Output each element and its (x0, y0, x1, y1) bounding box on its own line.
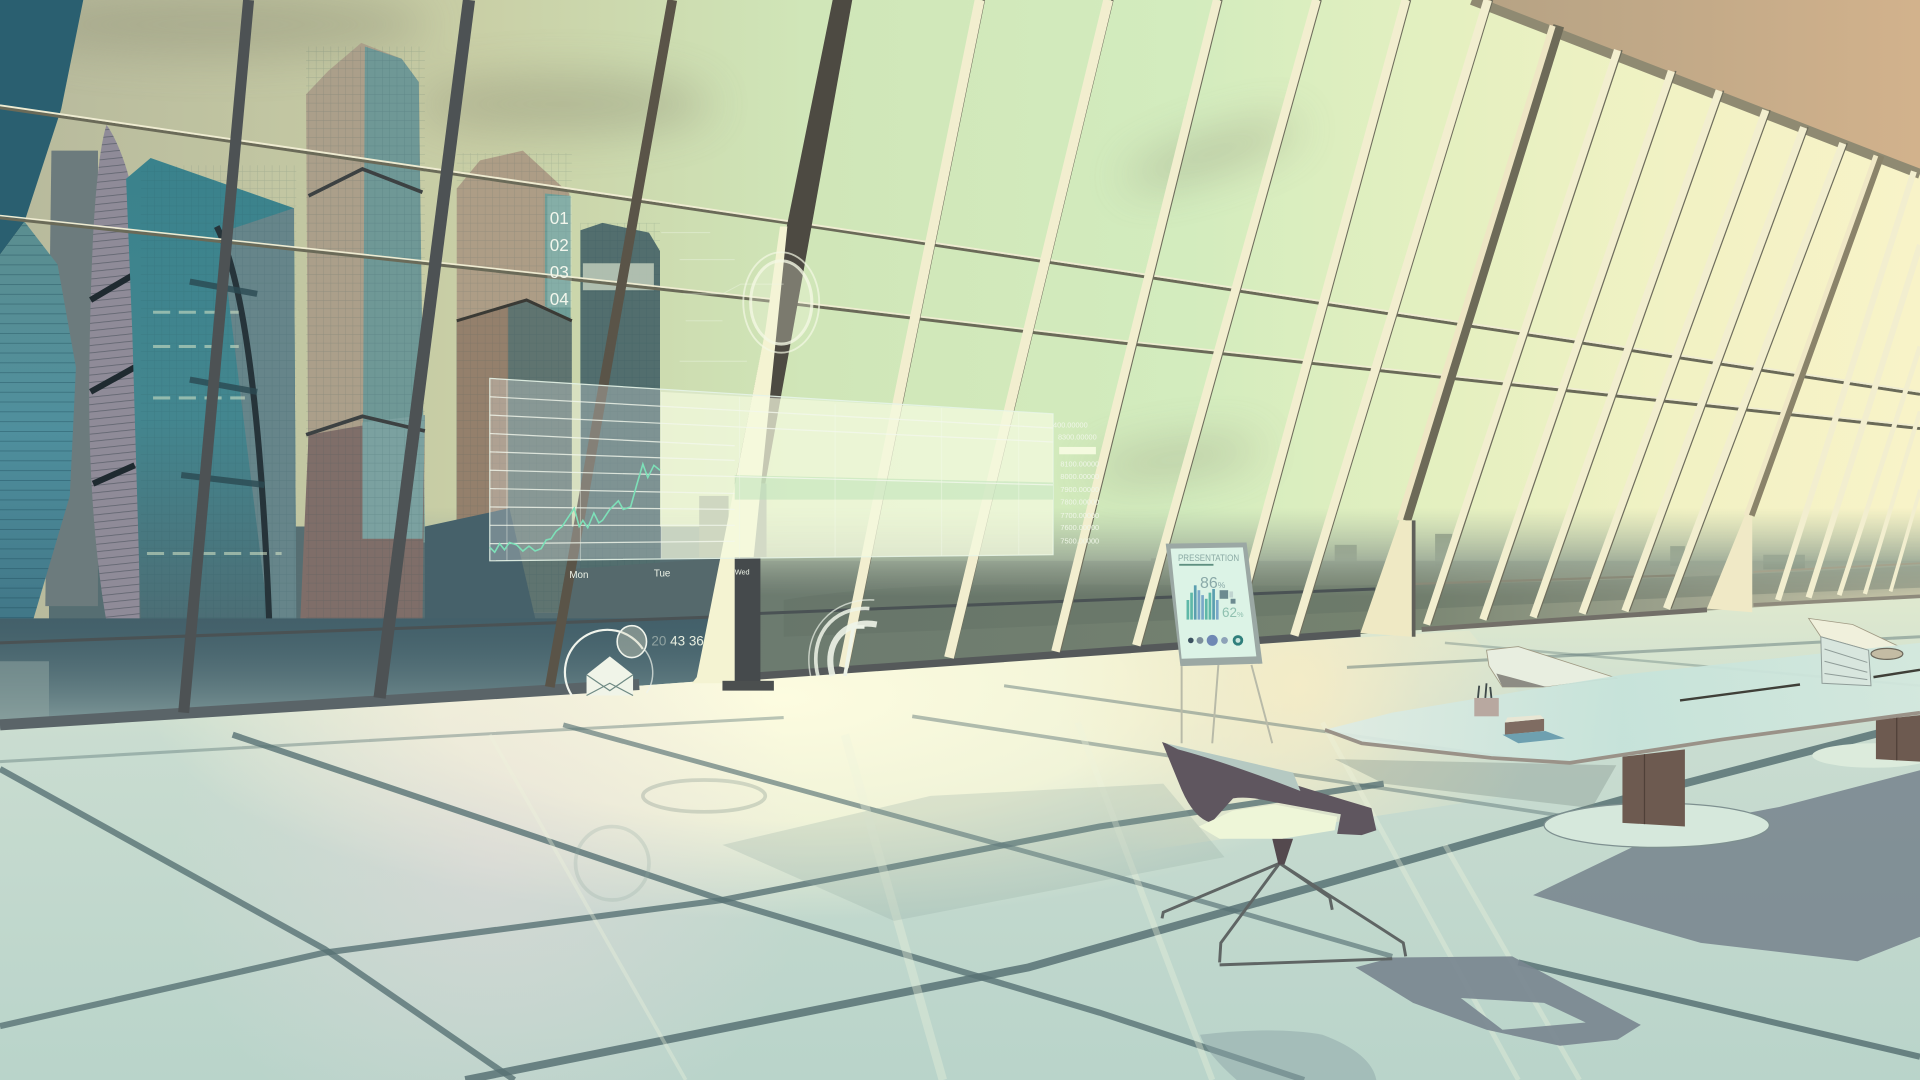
scale labels: 7500.00000 (1060, 537, 1099, 546)
scale labels: 7700.00000 (1060, 511, 1099, 520)
distant city and park (367, 534, 1920, 676)
low foreground buildings with fog (0, 618, 710, 729)
chair seat (1199, 804, 1337, 839)
axis labels: Mon (569, 570, 588, 581)
far right chair (1809, 618, 1899, 650)
chair rim (1166, 743, 1300, 791)
numbered menu (547, 196, 572, 309)
arc widget (809, 600, 877, 676)
table cable slot (1680, 670, 1920, 700)
hologram panel (490, 378, 1053, 561)
board dot row (1188, 635, 1243, 646)
axis labels (569, 567, 750, 581)
hologram reflection on floor (576, 780, 1224, 921)
low podium building (425, 508, 551, 698)
board title: PRESENTATION (1178, 553, 1239, 564)
dark infill behind towers (49, 527, 735, 637)
centre structural column (692, 0, 852, 691)
tower: background grey (45, 151, 98, 606)
tower: centre (300, 43, 425, 627)
horizon haze (367, 508, 1920, 596)
scale labels: 7600.00000 (1060, 523, 1099, 532)
skyline towers (0, 0, 735, 698)
book stack (1502, 715, 1565, 743)
table shadow band (1335, 759, 1616, 808)
axis labels: Tue (654, 569, 670, 580)
dark left mullions (184, 0, 672, 713)
table base (1544, 803, 1769, 847)
table top (1325, 643, 1920, 763)
sky (0, 0, 1920, 686)
ceiling (1472, 0, 1920, 174)
window transoms (0, 105, 1920, 429)
tower: right tan (457, 151, 572, 612)
scale labels: 7900.00000 (1060, 485, 1099, 494)
foreground chair (1162, 742, 1406, 965)
tower: main teal glass (126, 158, 296, 627)
cream mullions shadow lines (848, 0, 1847, 667)
axis labels: Wed (735, 567, 750, 576)
structural post right 2 (1707, 156, 1881, 612)
floor reflections of window bars (490, 722, 1580, 1080)
chair shell (1162, 742, 1376, 835)
chair legs (1162, 863, 1406, 965)
board small squares (1220, 590, 1236, 604)
floor tile seams (0, 637, 1920, 1080)
circuit lines (661, 233, 784, 361)
board bar chart (1187, 585, 1219, 620)
table base far (1812, 743, 1920, 768)
scale labels: 7800.00000 (1060, 497, 1099, 506)
scale labels: 8000.00000 (1060, 472, 1099, 481)
scale labels: 400.00000 (1053, 420, 1088, 429)
board frame (1166, 542, 1262, 666)
tower: far right dark (580, 223, 660, 590)
numbered menu: 01 (550, 208, 569, 228)
scale labels (1053, 420, 1099, 546)
window frame bottom (0, 596, 1920, 725)
hologram dashboard (490, 196, 1099, 696)
conference table (1325, 637, 1920, 847)
line chart (490, 464, 660, 552)
numbered menu: 04 (550, 289, 569, 309)
floor shadow: chair (1356, 956, 1641, 1046)
numbered menu: 02 (550, 235, 569, 255)
tower: twisted left, lower (0, 222, 76, 642)
cream mullions (844, 0, 1920, 667)
stacked folder (1821, 637, 1871, 686)
presentation board (1166, 542, 1272, 743)
far chair behind table (1487, 647, 1618, 687)
board numbers: 86% (1200, 575, 1226, 592)
presentation board: 62% (1222, 605, 1244, 620)
clock readout: 20 43 36 (651, 633, 704, 648)
mail widget (565, 626, 653, 696)
structural post right 1 (1360, 26, 1559, 637)
table legs (1622, 715, 1920, 827)
tower: twisted left, upper (0, 0, 83, 255)
scale labels: 8300.00000 (1058, 433, 1097, 442)
bowl (1871, 648, 1903, 659)
floor shadow: table (1533, 770, 1920, 961)
floor (0, 596, 1920, 1080)
table edge (1325, 713, 1920, 763)
floor reflection: chair (1200, 1030, 1376, 1080)
chair stem (1272, 839, 1293, 864)
board paper (1171, 547, 1256, 659)
scale labels: 8100.00000 (1060, 460, 1099, 469)
numbered menu: 03 (550, 262, 569, 282)
tower: sail with mauve panels (89, 125, 140, 622)
window handrail (0, 563, 1920, 643)
easel legs (1182, 665, 1272, 743)
radial gauge (743, 252, 819, 353)
pen holder (1474, 683, 1499, 716)
tower: far right glass block (566, 557, 735, 680)
clouds (12, 0, 1305, 486)
